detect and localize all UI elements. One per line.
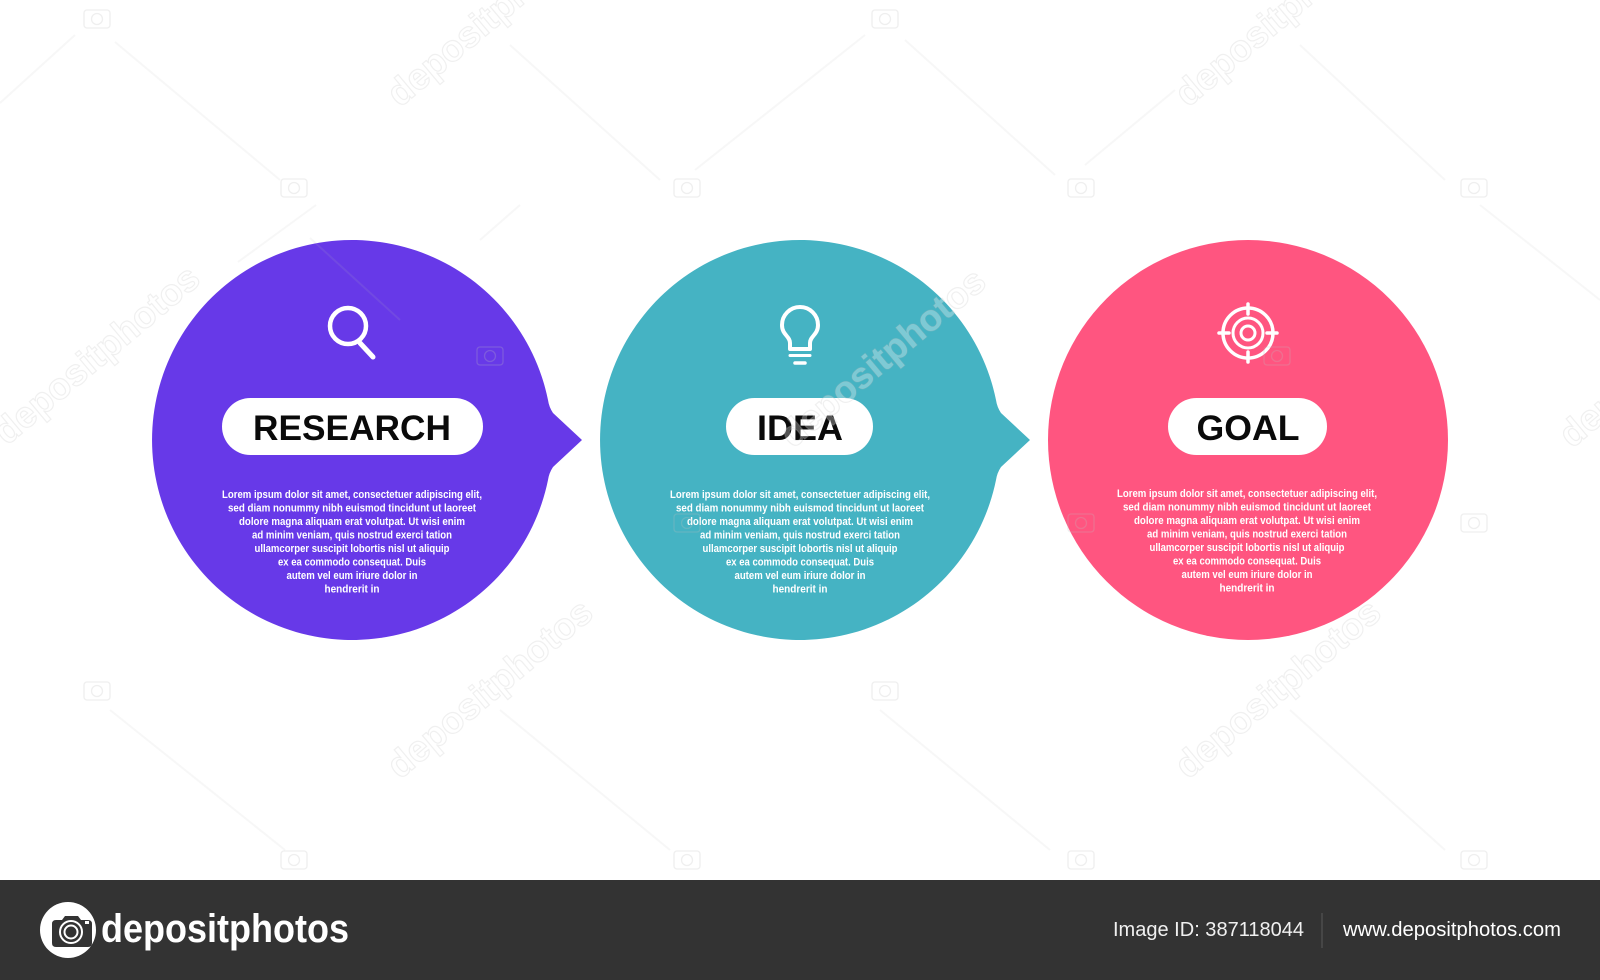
icon: target [1219,304,1277,362]
text block: research [222,489,482,596]
logo wordmark: depositphotos [101,907,349,951]
watermark text: depositphotos [379,591,600,786]
panel: goal circle [1048,240,1448,640]
text block: goal [1117,488,1377,594]
website url: www.depositphotos.com [1342,919,1561,941]
panel: idea bubble [600,240,1030,640]
heading pill: idea: IDEA [757,409,843,448]
watermark camera icons [84,10,1487,869]
icon: light bulb [782,307,818,363]
heading pill: goal [1168,398,1327,455]
icon: depositphotos camera logo [40,902,96,958]
watermark text: depositphotos [1167,591,1388,786]
text block: idea [670,489,930,596]
bubble shape [152,240,582,640]
heading pill: research: RESEARCH [253,409,451,448]
icon: magnifying glass [330,308,373,357]
watermark text: depositphotos [772,260,993,455]
image id: Image ID: 387118044 [1113,919,1304,941]
footer bar [0,880,1600,980]
panel: research bubble [152,240,582,640]
heading pill: research [222,398,483,455]
circle shape [1048,240,1448,640]
bubble shape [600,240,1030,640]
heading pill: idea [726,398,873,455]
heading pill: goal: GOAL [1196,409,1300,448]
